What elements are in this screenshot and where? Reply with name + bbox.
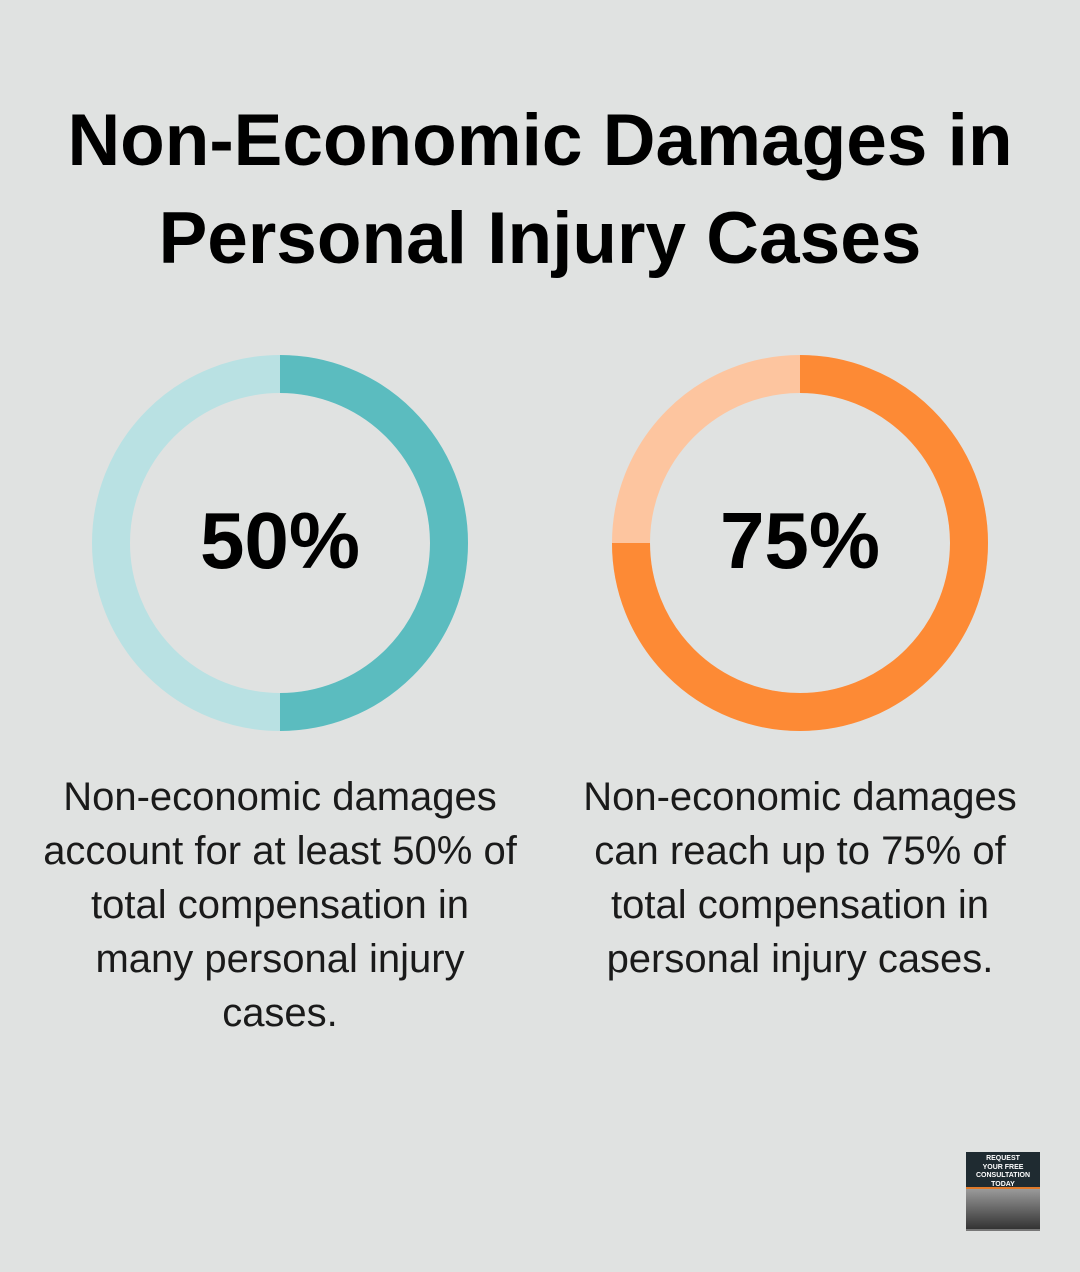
logo: consultation badge: TODAY — [991, 1180, 1015, 1188]
text block: left description: many personal injury — [95, 937, 465, 981]
text block: right description: can reach up to 75% of — [594, 829, 1006, 873]
text block: right description: Non-economic damages — [583, 775, 1017, 819]
donut chart: 75% — [612, 355, 988, 731]
logo: consultation badge — [966, 1152, 1040, 1231]
text block: left description — [43, 775, 517, 1035]
donut chart: 50%: 50% — [200, 496, 360, 585]
title — [67, 100, 1013, 279]
title: Personal Injury Cases — [159, 198, 921, 279]
logo: consultation badge: REQUEST — [986, 1155, 1020, 1162]
logo: consultation badge: CONSULTATION — [976, 1172, 1030, 1179]
text block: right description: personal injury cases. — [607, 937, 993, 981]
title: Non-Economic Damages in — [67, 100, 1013, 181]
logo: consultation badge: YOUR FREE — [983, 1164, 1023, 1170]
text block: left description: cases. — [222, 991, 338, 1035]
text block: right description — [583, 775, 1017, 981]
donut chart: 50% — [92, 355, 468, 731]
text block: left description: total compensation in — [91, 883, 469, 927]
text block: left description: account for at least 50% of — [43, 829, 517, 873]
text block: left description: Non-economic damages — [63, 775, 497, 819]
donut chart: 75%: 75% — [720, 496, 880, 585]
text block: right description: total compensation in — [611, 883, 989, 927]
